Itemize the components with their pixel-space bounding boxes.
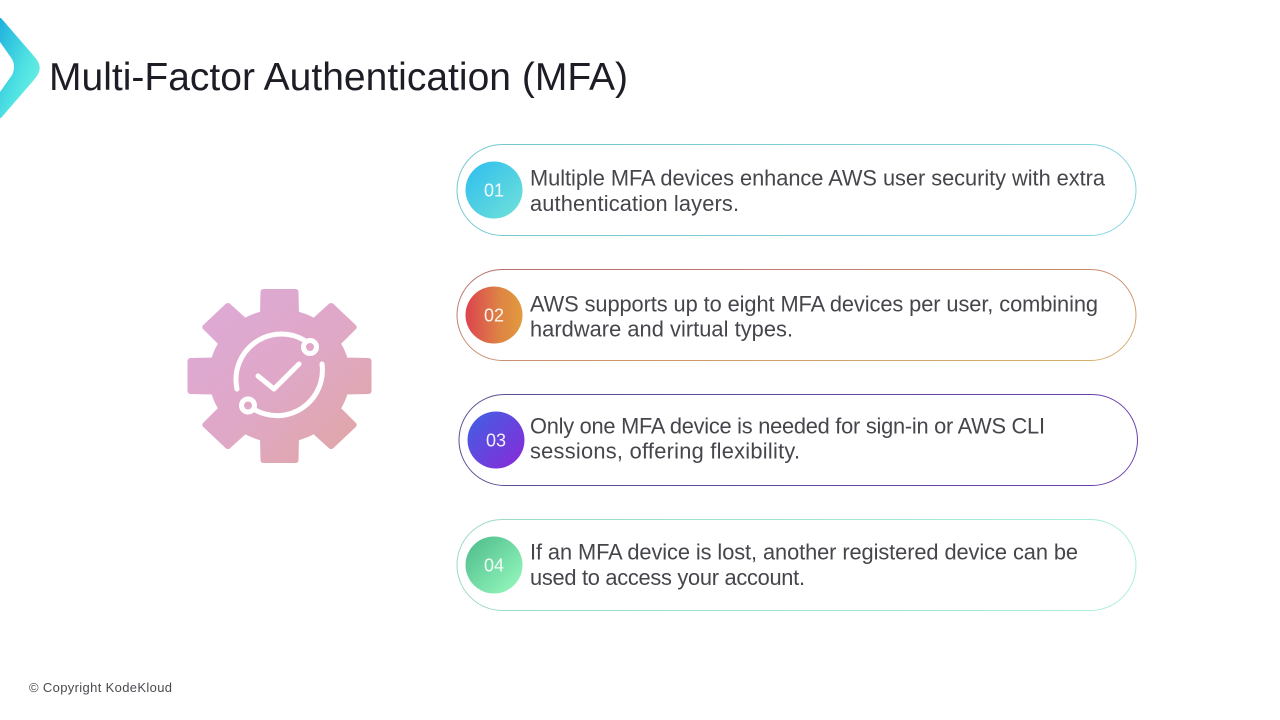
panel: item 03 [459, 394, 1138, 486]
title: Multi-Factor Authentication (MFA) [49, 56, 628, 99]
text 01: Multiple MFA devices enhance AWS user security with extra [530, 166, 1106, 190]
number badge 04 [466, 536, 522, 594]
number badge 01: 01 [484, 180, 504, 200]
text 02: AWS supports up to eight MFA devices per user, combining [530, 292, 1098, 316]
text 04: used to access your account. [530, 565, 805, 590]
text 01: authentication layers. [530, 191, 739, 216]
text 03: sessions, offering flexibility. [530, 438, 800, 464]
number badge 02 [466, 286, 522, 344]
number badge 03: 03 [486, 430, 506, 450]
text 03 [530, 414, 1045, 464]
panel: item 02 [457, 270, 1136, 360]
text 01 [530, 166, 1106, 216]
copyright footer: © Copyright KodeKloud [29, 680, 172, 695]
number badge 04: 04 [484, 556, 504, 576]
number badge 03 [468, 412, 524, 468]
text 02 [530, 292, 1098, 342]
panel: item 04 [457, 520, 1136, 610]
text 02: hardware and virtual types. [530, 316, 793, 342]
number badge 02: 02 [484, 306, 504, 326]
logo chevron [0, 18, 40, 118]
number badge 01 [466, 162, 522, 218]
icon: gear with check mark [190, 292, 368, 460]
text 04 [530, 540, 1078, 590]
text 04: If an MFA device is lost, another registered device can be [530, 540, 1078, 564]
text 03: Only one MFA device is needed for sign-in or AWS CLI [530, 414, 1045, 438]
panel: item 01 [457, 144, 1136, 236]
